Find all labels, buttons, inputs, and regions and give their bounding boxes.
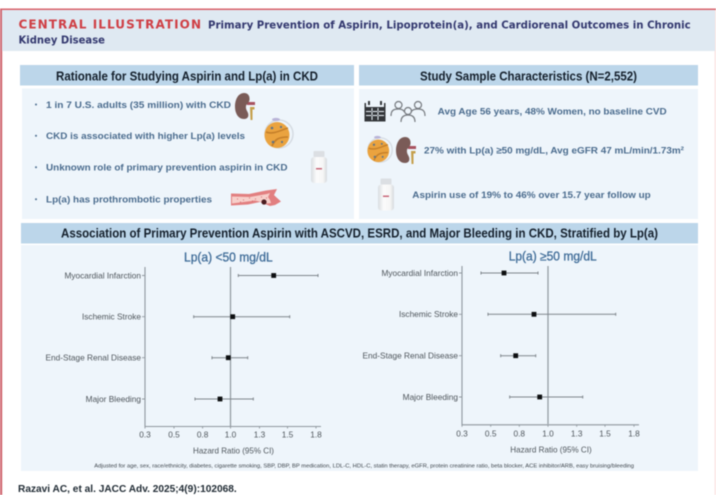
chart: Lp(a) under 50: Myocardial Infarction	[64, 270, 141, 280]
bullet list: Lp(a) has prothrombotic properties	[46, 195, 212, 205]
chart: Lp(a) 50 or above: Major Bleeding	[403, 392, 458, 402]
chart: Lp(a) 50 or above	[363, 249, 640, 454]
bullet list: 1 in 7 U.S. adults (35 million) with CKD	[46, 100, 231, 110]
chart: Lp(a) 50 or above: Ischemic Stroke	[399, 309, 458, 319]
panel: rationale	[20, 65, 354, 219]
chart: Lp(a) under 50: Ischemic Stroke	[82, 312, 141, 322]
chart: Lp(a) 50 or above: 1.5	[599, 428, 611, 438]
chart: Lp(a) under 50: Hazard Ratio (95% CI)	[193, 446, 274, 456]
icon: kidney	[235, 93, 255, 120]
bullet list	[35, 100, 288, 205]
panel: study sample	[359, 65, 698, 219]
heading: rationale: Rationale for Studying Aspirin and Lp(a) in CKD	[56, 69, 318, 83]
chart: Lp(a) 50 or above: 1.0	[542, 428, 554, 438]
chart: Lp(a) under 50: Major Bleeding	[86, 394, 141, 404]
icon: aspirin bottle	[311, 151, 327, 183]
heading: study sample: Study Sample Characteristics (N=2,552)	[420, 69, 637, 83]
title band	[2, 10, 715, 51]
heading: study sample	[359, 65, 698, 86]
sample characteristics text: Aspirin use of 19% to 46% over 15.7 year follow up	[412, 190, 651, 200]
chart: Lp(a) 50 or above: Lp(a) ≥50 mg/dL	[509, 249, 597, 263]
panel: association	[21, 223, 698, 471]
bullet list: CKD is associated with higher Lp(a) levels	[46, 131, 245, 141]
chart: Lp(a) under 50: 0.8	[197, 430, 209, 440]
icon: people	[391, 102, 425, 122]
icon: calendar	[364, 101, 386, 122]
icon: lipoprotein particle	[264, 118, 293, 148]
icon: aspirin bottle	[378, 178, 394, 210]
chart: Lp(a) under 50: 1.5	[282, 430, 294, 440]
chart: Lp(a) under 50: 0.5	[168, 430, 180, 440]
chart: Lp(a) under 50: 1.8	[310, 430, 322, 440]
bullet list: Unknown role of primary prevention aspirin in CKD	[46, 163, 288, 173]
chart: Lp(a) under 50: End-Stage Renal Disease	[46, 352, 141, 362]
heading: rationale	[20, 65, 354, 86]
title band: Primary Prevention of Aspirin, Lipoprotein(a), and Cardiorenal Outcomes in Chronic	[208, 18, 691, 32]
chart: Lp(a) under 50: 1.3	[254, 430, 266, 440]
sample characteristics text: 27% with Lp(a) ≥50 mg/dL, Avg eGFR 47 mL/min/1.73m²	[424, 146, 684, 156]
icon: artery with clot	[231, 189, 281, 206]
chart: Lp(a) 50 or above: Hazard Ratio (95% CI)	[510, 444, 592, 454]
chart: Lp(a) 50 or above: End-Stage Renal Disease	[363, 350, 458, 360]
heading: association: Association of Primary Prevention Aspirin with ASCVD, ESRD, and Major Bleeding in CKD, Stratified by Lp(a)	[61, 226, 658, 240]
citation: Razavi AC, et al. JACC Adv. 2025;4(9):102068.	[18, 484, 237, 495]
sample characteristics text: Avg Age 56 years, 48% Women, no baseline CVD	[438, 106, 667, 116]
title band: CENTRAL ILLUSTRATION	[18, 18, 201, 32]
chart: Lp(a) 50 or above: 0.8	[514, 428, 525, 438]
heading: association	[21, 223, 698, 244]
sample characteristics text	[412, 106, 684, 200]
chart: Lp(a) under 50	[46, 250, 322, 456]
icon: kidney	[396, 137, 416, 164]
chart: Lp(a) under 50: 1.0	[225, 430, 237, 440]
chart: Lp(a) under 50: Lp(a) <50 mg/dL	[184, 250, 273, 264]
chart: Lp(a) 50 or above: 1.3	[571, 428, 583, 438]
chart: Lp(a) under 50: 0.3	[139, 430, 151, 440]
chart: Lp(a) 50 or above: 0.3	[456, 428, 468, 438]
icon: lipoprotein particle	[367, 136, 392, 162]
chart: Lp(a) 50 or above: 0.5	[485, 428, 497, 438]
chart: Lp(a) 50 or above: Myocardial Infarction	[381, 268, 458, 278]
footnote: Adjusted for age, sex, race/ethnicity, diabetes, cigarette smoking, SBP, DBP, BP medication, LDL-C, HDL-C, statin therapy, eGFR, protein creatinine ratio, beta blocker, ACE inhibitor/ARB, easy bruising/bleeding	[94, 464, 634, 470]
title band: Kidney Disease	[18, 33, 105, 46]
chart: Lp(a) 50 or above: 1.8	[628, 428, 640, 438]
